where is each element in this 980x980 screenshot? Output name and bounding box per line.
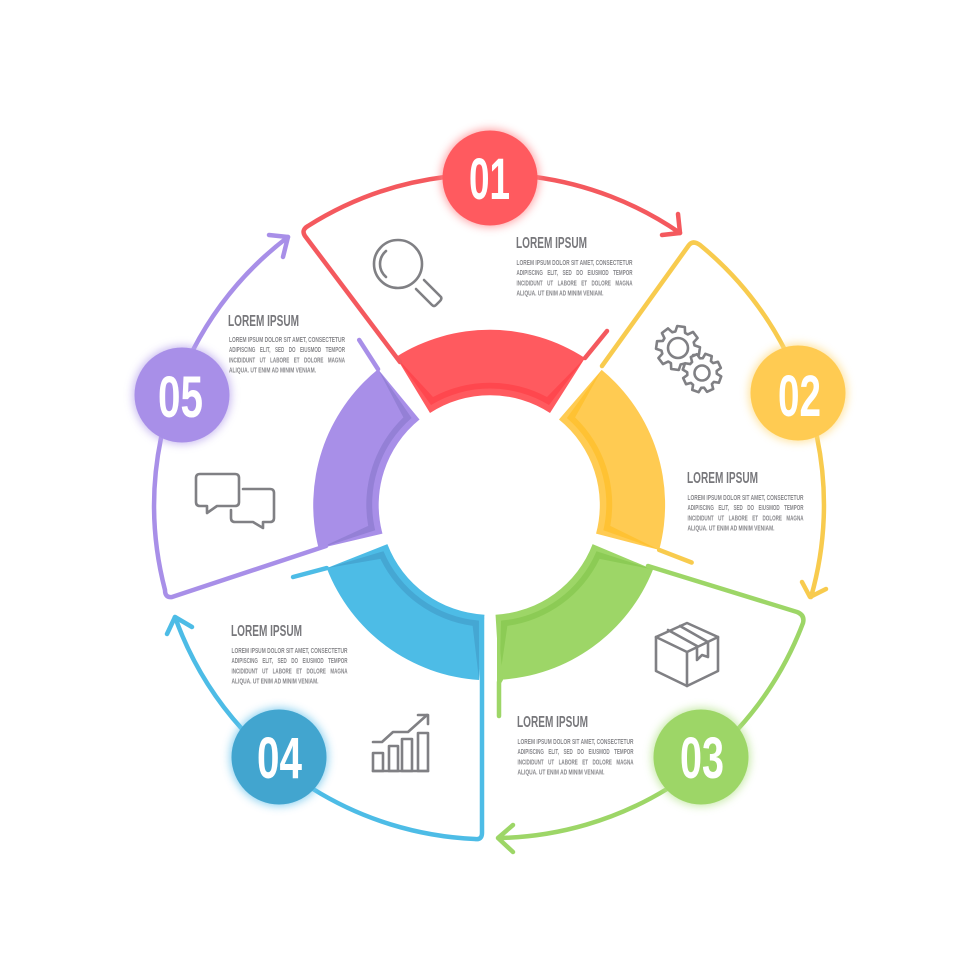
icon: growth bar chart [373,715,428,771]
text block 03: LOREM IPSUM [517,714,588,731]
text block 02: INCIDIDUNT UT LABORE ET DOLORE MAGNA [688,515,804,522]
text block 05 [228,313,345,375]
badge 04 [230,708,328,806]
text block 01: LOREM IPSUM [516,235,587,252]
badge 03: 03 [680,726,724,791]
ring segment 2: yellow [548,361,693,588]
text block 03: INCIDIDUNT UT LABORE ET DOLORE MAGNA [518,759,634,766]
text block 01: LOREM IPSUM DOLOR SIT AMET, CONSECTETUR [516,260,632,267]
text block 04: LOREM IPSUM [231,623,302,640]
text block 03: ALIQUA. UT ENIM AD MINIM VENIAM. [518,770,605,777]
text block 02: LOREM IPSUM [687,470,758,487]
icon: speech bubbles [196,474,274,528]
text block 03: LOREM IPSUM DOLOR SIT AMET, CONSECTETUR [518,739,634,746]
icon: gears [654,324,727,398]
ring segment 3: green [467,524,669,716]
text block 05: LOREM IPSUM DOLOR SIT AMET, CONSECTETUR [229,337,345,344]
icon: magnifying glass [374,240,441,306]
badge 02 [749,344,847,442]
badge 01 [441,129,539,227]
text block 01: ALIQUA. UT ENIM AD MINIM VENIAM. [516,291,604,298]
ring segment 4: blue [292,511,512,702]
text block 02 [687,470,804,533]
text block 04: INCIDIDUNT UT LABORE ET DOLORE MAGNA [232,668,348,675]
text block 04: ADIPISCING ELIT, SED DO EIUSMOD TEMPOR [232,658,348,665]
text block 01: ADIPISCING ELIT, SED DO EIUSMOD TEMPOR [516,270,632,277]
text block 04: LOREM IPSUM DOLOR SIT AMET, CONSECTETUR [232,648,348,655]
badge 03 [652,708,750,806]
ring segment 1: red [396,330,607,413]
text block 04: ALIQUA. UT ENIM AD MINIM VENIAM. [232,679,319,686]
text block 05: ADIPISCING ELIT, SED DO EIUSMOD TEMPOR [229,347,345,354]
badge 01: 01 [469,147,510,212]
text block 01: INCIDIDUNT UT LABORE ET DOLORE MAGNA [516,280,632,287]
text block 05: ALIQUA. UT ENIM AD MINIM VENIAM. [229,368,316,375]
badge 05: 05 [158,365,203,430]
outline and arrow 1: red [304,177,680,362]
ring segment 5: purple [293,340,437,566]
text block 01 [516,235,632,298]
text block 02: ALIQUA. UT ENIM AD MINIM VENIAM. [688,526,775,533]
text block 03: ADIPISCING ELIT, SED DO EIUSMOD TEMPOR [518,749,634,756]
icon: cardboard box [656,623,718,686]
text block 05: INCIDIDUNT UT LABORE ET DOLORE MAGNA [229,357,345,364]
text block 05: LOREM IPSUM [228,313,299,330]
outline and arrow 2: yellow [602,242,826,597]
text block 02: LOREM IPSUM DOLOR SIT AMET, CONSECTETUR [688,495,804,502]
badge 05 [133,346,231,444]
text block 02: ADIPISCING ELIT, SED DO EIUSMOD TEMPOR [688,505,804,512]
text block 03 [517,714,634,777]
outline and arrow 3: green [498,566,803,852]
badge 04: 04 [257,726,302,791]
outline and arrow 4: blue [167,617,482,839]
badge 02: 02 [778,364,821,429]
text block 04 [231,623,348,686]
outline and arrow 5: purple [154,235,326,597]
